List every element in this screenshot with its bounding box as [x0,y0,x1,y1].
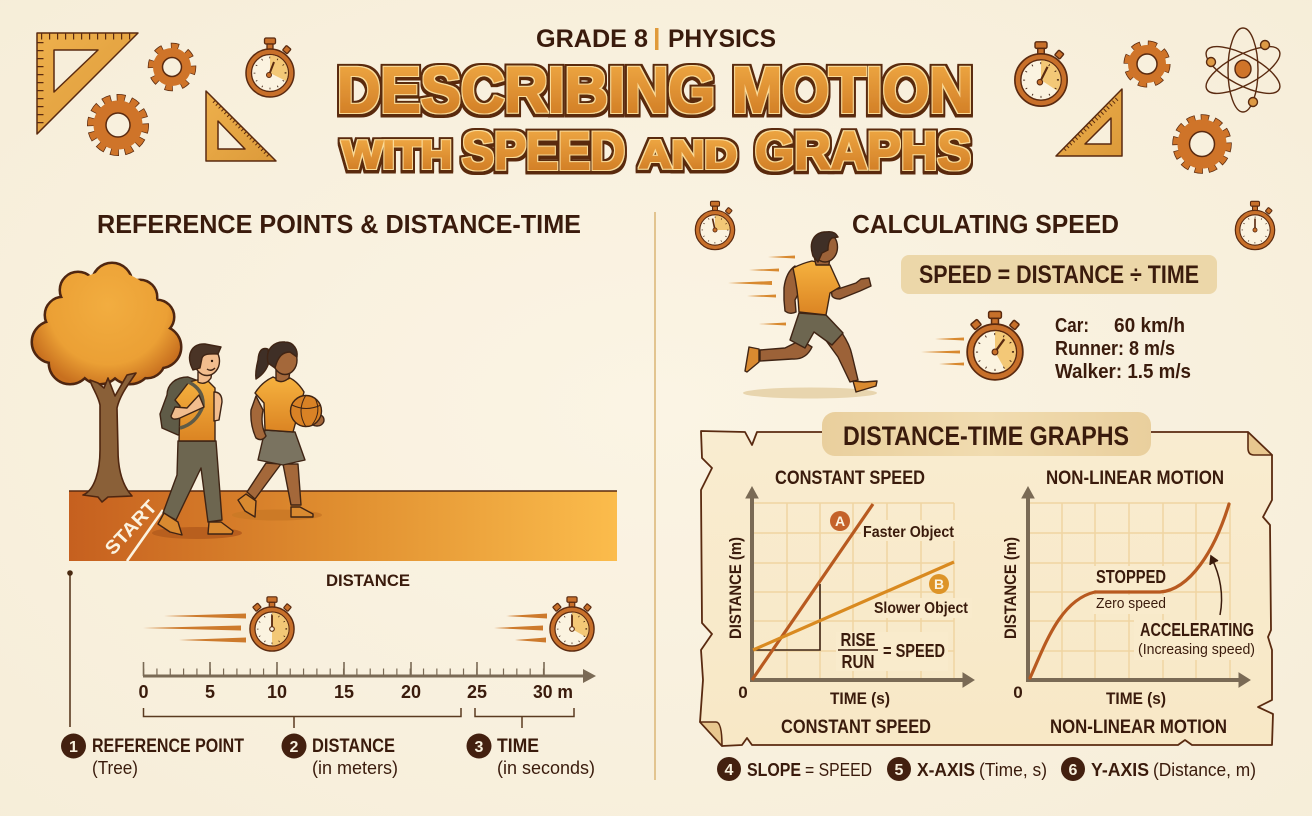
back leg [760,340,812,361]
icon: large set square top left [37,33,138,134]
hair [811,232,838,262]
ruler labels: 30 m [533,682,573,702]
speed lines: large stopwatch [921,338,964,366]
ruler labels: 10 [267,682,287,702]
icon: stopwatch on ruler 2 [550,597,594,651]
main title [337,54,973,181]
x axis label: TIME (s) [830,689,890,708]
speed examples: Walker: 1.5 m/s [1055,361,1191,383]
shirt [793,261,840,315]
strap and arm [180,381,203,428]
speed lines: runner [728,256,795,326]
icon: gear large right [1177,119,1227,169]
callout 3: time: (in seconds) [497,758,595,778]
panel: distance-time graphs parchment [700,412,1273,746]
illustration: boy with backpack [152,344,242,539]
line B [753,562,954,650]
x axis label: TIME (s) [1106,689,1166,708]
origin: 0 [1013,683,1023,702]
callout 5: x-axis: (Time, s) [979,760,1047,780]
increasing speed label: (Increasing speed) [1138,641,1255,658]
main title: DESCRIBING MOTION [337,54,973,126]
shirt [175,378,215,441]
speed examples: 60 km/h [1114,315,1185,337]
icon: gear small left [152,47,192,87]
speed examples [1055,315,1191,383]
y axis label: DISTANCE (m) [726,537,745,639]
formula box: SPEED = DISTANCE ÷ TIME [919,261,1199,289]
canopy fill [33,264,180,383]
callout 5: x-axis [887,757,1047,781]
shirt [255,377,304,432]
callout 6: y-axis [1061,757,1256,781]
grid [753,503,954,680]
callout 4: slope: 4 [725,762,734,779]
origin: 0 [738,683,748,702]
distance ruler axis [143,662,596,683]
icon: small set square [206,91,276,161]
badge A: A [835,513,845,529]
axes [1022,487,1250,687]
start label: START [101,497,162,559]
heading: reference points: REFERENCE POINTS & DISTANCE-TIME [97,209,581,239]
callout 6: y-axis: Y-AXIS [1091,760,1149,780]
motion curve [1030,504,1229,678]
back arm [784,266,803,313]
callout 3: time [466,734,595,778]
grid [1030,503,1230,680]
y axis label: DISTANCE (m) [1001,537,1020,639]
skirt [258,430,305,465]
icon: large stopwatch [967,311,1023,380]
icon: set square right [1056,89,1122,156]
head [814,254,830,265]
line A [752,504,873,680]
ruler labels: 0 [138,682,149,702]
face [276,370,290,382]
ponytail [256,348,269,379]
chart: non-linear motion: NON-LINEAR MOTION [1046,468,1224,489]
slope triangle [753,584,820,650]
callout 1: reference point: (Tree) [92,758,138,778]
axes [746,487,974,687]
speed examples: Runner: 8 m/s [1055,338,1175,360]
chart: non-linear motion [1001,468,1258,738]
callout 1: reference point [61,734,244,778]
accelerating arrow [1210,556,1222,615]
callout 5: x-axis: X-AXIS [917,760,975,780]
header tab [822,412,1151,456]
slower label: Slower Object [874,600,969,617]
rise over run: = SPEED [883,641,945,661]
badge B: B [934,576,944,592]
callout 1: reference point: REFERENCE POINT [92,736,244,757]
heading: calculating speed: CALCULATING SPEED [852,209,1119,239]
front arm [831,278,871,299]
zero speed label: Zero speed [1096,595,1166,612]
subtitle: grade and subject: GRADE 8 [536,25,648,53]
icon: small stopwatch left [695,201,735,250]
callout 4: slope: = SPEED [805,760,872,780]
speed examples: Car: [1055,315,1089,337]
main title: SPEED [462,122,625,181]
callout 4: slope: SLOPE [747,760,801,780]
faster label: Faster Object [863,524,955,541]
header title block [337,25,973,181]
badge B [929,574,949,594]
rise over run [838,630,945,672]
chart: constant speed: CONSTANT SPEED [775,468,925,489]
front leg [822,333,858,382]
tree trunk [83,373,136,502]
callout 6: y-axis: 6 [1069,762,1078,779]
accelerating label: ACCELERATING [1140,620,1254,640]
track with start line [69,491,617,561]
main title: AND [639,134,737,177]
callout 2: distance: DISTANCE [312,736,395,757]
icon: stopwatch top left [246,38,294,97]
back shoe [745,347,759,372]
callout 3: time: TIME [497,736,539,757]
ruler labels: 25 [467,682,487,702]
label masks [1093,566,1258,660]
icon: gear large left [92,99,144,151]
main title: GRAPHS [755,122,971,181]
chart caption: CONSTANT SPEED [781,717,931,738]
icon: stopwatch on ruler 1 [250,597,294,651]
ruler labels: 15 [334,682,354,702]
icon: atom [1200,28,1286,112]
subtitle: grade and subject [536,25,776,53]
rise over run: RISE [840,630,876,650]
callout 4: slope [717,757,872,781]
callout 2: distance [282,734,398,778]
callout 5: x-axis: 5 [895,762,904,779]
ruler labels [138,682,573,702]
reference point line [67,570,73,727]
label: distance: DISTANCE [326,571,410,590]
backpack [160,377,196,435]
brackets [144,708,574,728]
basketball [290,395,322,427]
label masks [836,520,972,671]
header tab: DISTANCE-TIME GRAPHS [843,421,1129,451]
formula box [901,255,1217,294]
illustration: girl with ball [232,342,324,520]
chart caption: NON-LINEAR MOTION [1050,717,1227,738]
ruler labels: 5 [205,682,215,702]
stopped label: STOPPED [1096,567,1166,587]
callout 2: distance: 2 [290,739,299,756]
hair [267,342,297,368]
pants [163,441,222,522]
neck and face [198,370,212,383]
subtitle: grade and subject: PHYSICS [668,25,776,53]
chart: constant speed [726,468,974,738]
callout 1: reference point: 1 [69,739,78,756]
legs [247,463,301,505]
callout 6: y-axis: (Distance, m) [1153,760,1256,780]
front shoe [853,381,877,392]
illustration: runner [743,232,877,398]
ruler labels: 20 [401,682,421,702]
shoes [238,494,313,517]
icon: stopwatch top right [1015,42,1067,106]
hand [310,414,324,426]
left arm [251,396,266,440]
hair [190,344,221,370]
callout 2: distance: (in meters) [312,758,398,778]
speed lines: first stopwatch [143,614,246,642]
tree canopy [32,263,181,384]
speed lines: second stopwatch [494,614,547,642]
badge A [830,511,850,531]
shoes [158,513,233,535]
main title: WITH [342,134,452,177]
rise over run: RUN [842,652,874,672]
shorts [790,313,843,348]
icon: gear small right [1128,44,1166,84]
icon: small stopwatch right [1235,201,1275,250]
callout 3: time: 3 [475,739,484,756]
illustration: tree [32,263,181,502]
